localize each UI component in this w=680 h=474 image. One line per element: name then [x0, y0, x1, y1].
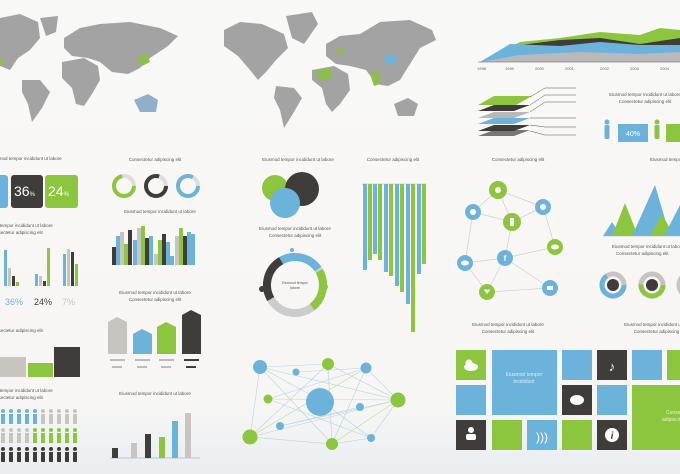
ring chart: labore	[290, 286, 300, 290]
ring chart: Eiusmod tempor incididunt ut labore	[259, 226, 331, 231]
chart: area chart top right: 1999	[505, 66, 515, 71]
chart: triangle peaks	[603, 185, 680, 236]
bar chart: vertical hanging bars	[362, 157, 426, 332]
bar chart: bottom: Eiusmod tempor incididunt ut labore	[119, 391, 191, 396]
chart: area chart top right: 2000	[535, 66, 545, 71]
donuts right	[602, 274, 680, 296]
venn circles: Eiusmod tempor incididunt ut labore	[262, 157, 334, 162]
tiles grid	[456, 350, 680, 450]
venn circles	[262, 157, 334, 218]
text block right top: Eiusmod tempor incididunt ut labore	[609, 92, 680, 97]
chart: area chart top right	[477, 28, 680, 71]
stat boxes: 24%	[48, 183, 70, 199]
tiles grid: i	[611, 431, 614, 442]
network diagram icons right	[457, 181, 563, 300]
chart: area chart top right: 2001	[565, 66, 575, 71]
text block right top	[609, 92, 680, 104]
stat boxes	[0, 175, 78, 208]
chart: area chart top right: 2002	[600, 66, 610, 71]
tiles grid: )))	[536, 430, 548, 444]
bar chart: bottom	[110, 391, 200, 458]
bar chart: arrow bars	[108, 290, 201, 368]
captions: Eiusmod tempor incididunt ut labore	[472, 322, 544, 327]
network diagram icons right: f	[504, 254, 507, 263]
network diagram bottom	[242, 358, 406, 450]
text block right top: Consectetur adipiscing elit	[619, 99, 672, 104]
icons: people percentages: 40%	[626, 131, 640, 138]
bar chart: steps	[0, 328, 80, 377]
ring chart: Eiusmod tempor	[282, 281, 309, 285]
bar chart: vertical hanging bars: Consectetur adipiscing elit	[367, 157, 420, 162]
icons: people percentages	[604, 120, 680, 142]
map: world map center	[224, 12, 436, 128]
bar chart: left groups: 24%	[34, 297, 52, 307]
caption: Consectetur adipiscing elit	[492, 157, 545, 162]
bar chart: left groups: 7%	[62, 297, 75, 307]
bar chart: left groups	[0, 223, 78, 307]
captions	[472, 322, 680, 334]
chart: area chart top right: 2003	[630, 66, 640, 71]
chart: area chart top right: 2004	[660, 66, 670, 71]
ring chart: Consectetur adipiscing elit	[269, 233, 322, 238]
bar chart: arrow bars: Eiusmod tempor incididunt ut labore	[119, 290, 191, 295]
tiles grid: ♪	[609, 359, 615, 374]
text block	[612, 244, 680, 256]
text block: Consectetur adipiscing elit	[616, 251, 669, 256]
bar chart: grouped bars: Eiusmod tempor incididunt ut labore	[124, 209, 196, 214]
ring chart	[256, 226, 334, 324]
chart: layered stack	[478, 88, 576, 136]
stat boxes: 36%	[14, 183, 36, 199]
donuts	[114, 157, 198, 196]
tiles grid: incididunt	[513, 379, 535, 385]
chart: area chart top right: 1998	[477, 66, 487, 71]
donuts: Consectetur adipiscing elit	[129, 157, 182, 162]
bar chart: left groups: 36%	[5, 297, 23, 307]
bar chart: grouped bars	[112, 209, 196, 265]
captions: Consectetur adipiscing elit	[482, 329, 535, 334]
map: world map left	[0, 14, 178, 122]
icons: people rows	[0, 388, 80, 462]
tiles grid: Eiusmod tempor	[506, 372, 543, 378]
bar chart: arrow bars: Consectetur adipiscing elit	[129, 297, 182, 302]
